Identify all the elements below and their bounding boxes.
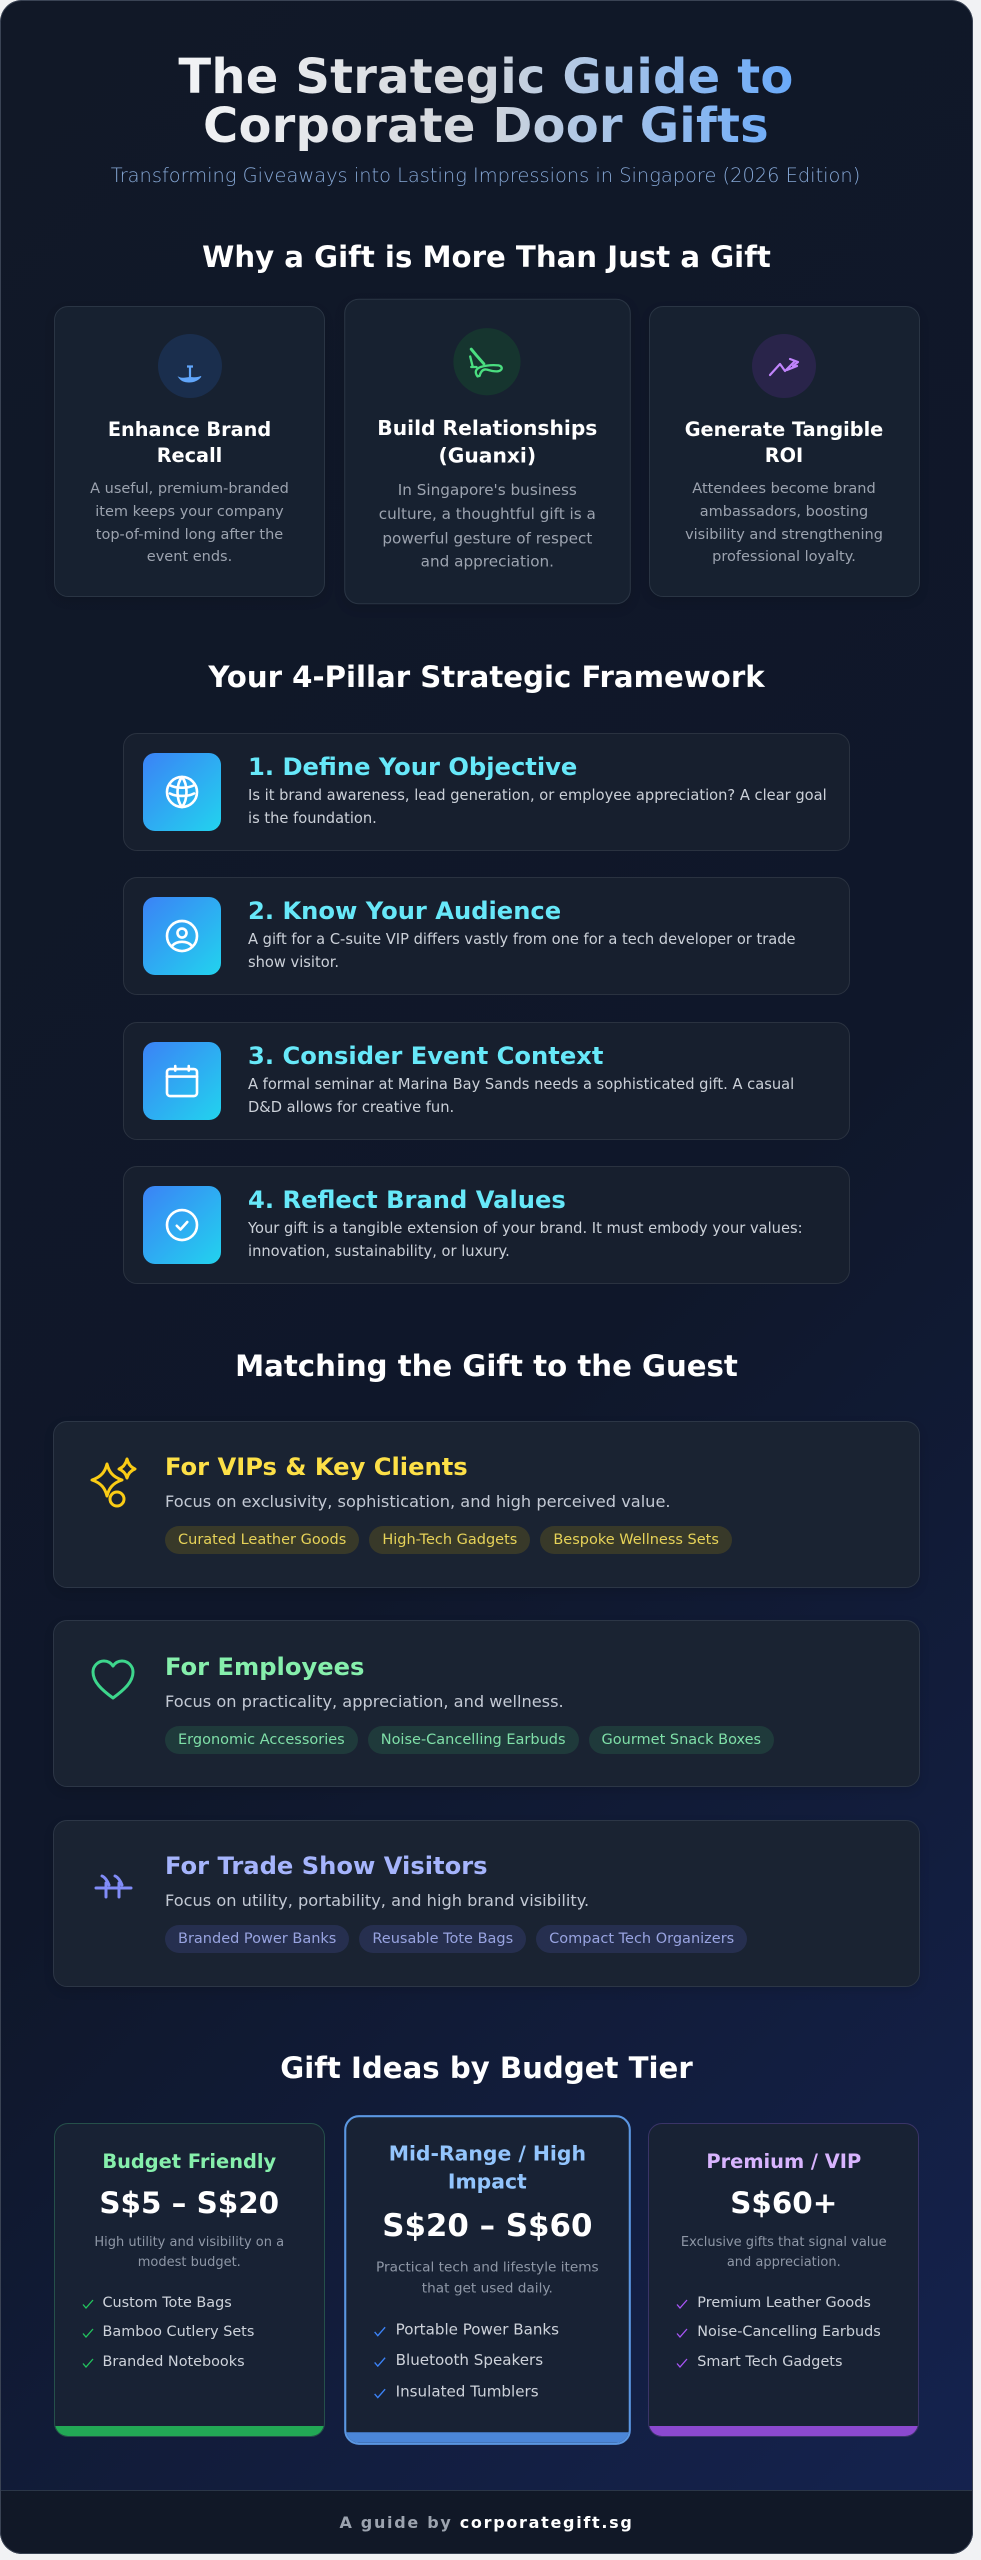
pillar text: innovation, sustainability, or luxury. xyxy=(248,1243,510,1260)
tags: Noise-Cancelling Earbuds xyxy=(381,1732,566,1748)
pillar title: 2. Know Your Audience xyxy=(248,897,561,925)
icon: relationships xyxy=(453,328,521,395)
card text: item keeps your company xyxy=(95,504,284,520)
card text: event ends. xyxy=(147,549,232,565)
tier accent bar xyxy=(54,2426,324,2436)
tier name: Impact xyxy=(448,2170,526,2194)
pillar text: is the foundation. xyxy=(248,810,377,827)
card title: Recall xyxy=(157,444,222,467)
tier accent bar xyxy=(346,2432,628,2443)
guest text: Focus on practicality, appreciation, and wellness. xyxy=(165,1692,564,1710)
pillar 3 xyxy=(123,1022,850,1140)
card text xyxy=(90,481,289,565)
card text xyxy=(378,482,596,571)
card text: visibility and strengthening xyxy=(685,526,883,542)
tier list xyxy=(374,2322,559,2400)
card text: powerful gesture of respect xyxy=(382,530,592,547)
tags xyxy=(165,1925,747,1953)
pillar text xyxy=(248,1220,803,1260)
pillar title: 1. Define Your Objective xyxy=(248,753,577,781)
pillar 1 xyxy=(123,733,850,851)
tags: Gourmet Snack Boxes xyxy=(602,1732,761,1748)
tier card: budget friendly xyxy=(54,2123,325,2437)
footer xyxy=(0,2490,973,2554)
tags: Compact Tech Organizers xyxy=(549,1931,734,1947)
tier card: premium xyxy=(648,2123,919,2437)
card: enhance brand recall xyxy=(54,306,325,597)
card text: top-of-mind long after the xyxy=(96,526,283,542)
guest title: For VIPs & Key Clients xyxy=(165,1453,468,1481)
tier description: Practical tech and lifestyle items xyxy=(376,2260,598,2276)
tags: Branded Power Banks xyxy=(178,1931,336,1947)
card text: ambassadors, boosting xyxy=(700,504,868,520)
panel: budget tiers xyxy=(54,2115,919,2445)
card: build relationships xyxy=(344,299,630,604)
footer: A guide by corporategift.sg xyxy=(339,2513,634,2532)
tier name xyxy=(388,2141,586,2194)
tags: Bespoke Wellness Sets xyxy=(553,1532,719,1548)
pillar title: 3. Consider Event Context xyxy=(248,1042,603,1070)
tier list: Portable Power Banks xyxy=(395,2322,559,2339)
heading: matching: Matching the Gift to the Guest xyxy=(235,1349,738,1383)
tier price: S$20 – S$60 xyxy=(382,2208,592,2243)
tier description xyxy=(94,2235,284,2270)
card text: Attendees become brand xyxy=(692,481,876,497)
tier description: modest budget. xyxy=(138,2254,241,2270)
guest text: Focus on utility, portability, and high brand visibility. xyxy=(165,1891,589,1910)
pillar 4 xyxy=(123,1166,850,1284)
pillar text: A gift for a C-suite VIP differs vastly from one for a tech developer or trade xyxy=(248,931,796,948)
card: generate ROI xyxy=(648,306,920,597)
tags: Reusable Tote Bags xyxy=(372,1931,513,1947)
subtitle: Transforming Giveaways into Lasting Impressions in Singapore (2026 Edition) xyxy=(111,164,860,187)
card title xyxy=(685,418,883,467)
tier name: Budget Friendly xyxy=(102,2150,276,2173)
icon: brand recall xyxy=(158,334,222,398)
tags: High-Tech Gadgets xyxy=(382,1532,517,1548)
title: Corporate Door Gifts xyxy=(203,98,769,154)
pillar title: 4. Reflect Brand Values xyxy=(248,1186,566,1214)
pillar text xyxy=(248,931,796,971)
tier list: Premium Leather Goods xyxy=(697,2295,871,2311)
panel: why a gift cards xyxy=(54,298,920,604)
icon: heart xyxy=(92,1660,134,1700)
card text: professional loyalty. xyxy=(712,549,856,565)
pillar text xyxy=(248,787,827,827)
tier accent bar xyxy=(649,2426,918,2436)
panel: guest types xyxy=(53,1421,920,1987)
guest title: For Trade Show Visitors xyxy=(165,1852,488,1880)
card text: A useful, premium-branded xyxy=(90,481,289,497)
panel: framework pillars xyxy=(123,733,850,1284)
heading: budget tiers: Gift Ideas by Budget Tier xyxy=(280,2051,693,2085)
tier list: Insulated Tumblers xyxy=(395,2383,538,2400)
card title: Enhance Brand xyxy=(108,418,271,441)
tier list: Custom Tote Bags xyxy=(102,2295,232,2311)
icon: user xyxy=(143,897,221,975)
tier list: Noise-Cancelling Earbuds xyxy=(697,2324,881,2340)
tier description xyxy=(681,2235,887,2270)
tags xyxy=(165,1726,774,1754)
tier list: Smart Tech Gadgets xyxy=(697,2354,842,2370)
pillar text: Is it brand awareness, lead generation, or employee appreciation? A clear goal xyxy=(248,787,827,804)
icon: globe xyxy=(143,753,221,831)
card title: ROI xyxy=(765,444,803,467)
tier card: mid-range xyxy=(344,2115,630,2445)
tier price: S$60+ xyxy=(730,2186,837,2220)
tier list: Bluetooth Speakers xyxy=(395,2353,543,2370)
card title: (Guanxi) xyxy=(438,444,536,468)
pillar text: A formal seminar at Marina Bay Sands needs a sophisticated gift. A casual xyxy=(248,1076,794,1093)
pillar text: Your gift is a tangible extension of your brand. It must embody your values: xyxy=(248,1220,803,1237)
card title xyxy=(377,416,597,468)
card title: Generate Tangible xyxy=(685,418,883,441)
icon: check circle xyxy=(143,1186,221,1264)
pillar 2 xyxy=(123,877,850,995)
pillar text xyxy=(248,1076,794,1116)
tier description: and appreciation. xyxy=(727,2254,841,2270)
tier description: High utility and visibility on a xyxy=(94,2235,284,2250)
tier name: Mid-Range / High xyxy=(388,2141,586,2166)
tier list xyxy=(676,2295,881,2370)
guest card: VIPs xyxy=(53,1420,920,1588)
guest card: employees xyxy=(53,1620,920,1787)
tier list xyxy=(82,2295,254,2370)
card text: culture, a thoughtful gift is a xyxy=(378,506,596,523)
guest card: trade show xyxy=(53,1820,920,1986)
card text xyxy=(685,481,883,565)
tier name: Premium / VIP xyxy=(706,2150,861,2173)
tier list: Branded Notebooks xyxy=(102,2354,245,2370)
tags xyxy=(165,1526,732,1554)
icon: calendar xyxy=(143,1042,221,1120)
card title xyxy=(108,418,271,467)
tier list: Bamboo Cutlery Sets xyxy=(102,2324,254,2340)
card title: Build Relationships xyxy=(377,416,597,440)
tags: Curated Leather Goods xyxy=(178,1532,346,1548)
guest text: Focus on exclusivity, sophistication, and high perceived value. xyxy=(165,1492,671,1511)
icon: trade show xyxy=(94,1874,132,1898)
heading: why a gift: Why a Gift is More Than Just a Gift xyxy=(202,240,771,274)
tier description: Exclusive gifts that signal value xyxy=(681,2235,887,2250)
guest title: For Employees xyxy=(165,1652,364,1680)
tier description: that get used daily. xyxy=(421,2281,553,2296)
card text: and appreciation. xyxy=(420,554,554,571)
pillar text: D&D allows for creative fun. xyxy=(248,1099,454,1116)
icon: roi xyxy=(752,334,816,398)
icon: sparkles xyxy=(90,1458,136,1508)
tier description xyxy=(376,2260,598,2296)
card text: In Singapore's business xyxy=(397,482,577,499)
title xyxy=(178,49,794,154)
tier price: S$5 – S$20 xyxy=(99,2186,279,2220)
heading: framework: Your 4-Pillar Strategic Framework xyxy=(208,660,765,694)
title: The Strategic Guide to xyxy=(178,49,794,105)
pillar text: show visitor. xyxy=(248,954,339,971)
tags: Ergonomic Accessories xyxy=(178,1732,345,1748)
